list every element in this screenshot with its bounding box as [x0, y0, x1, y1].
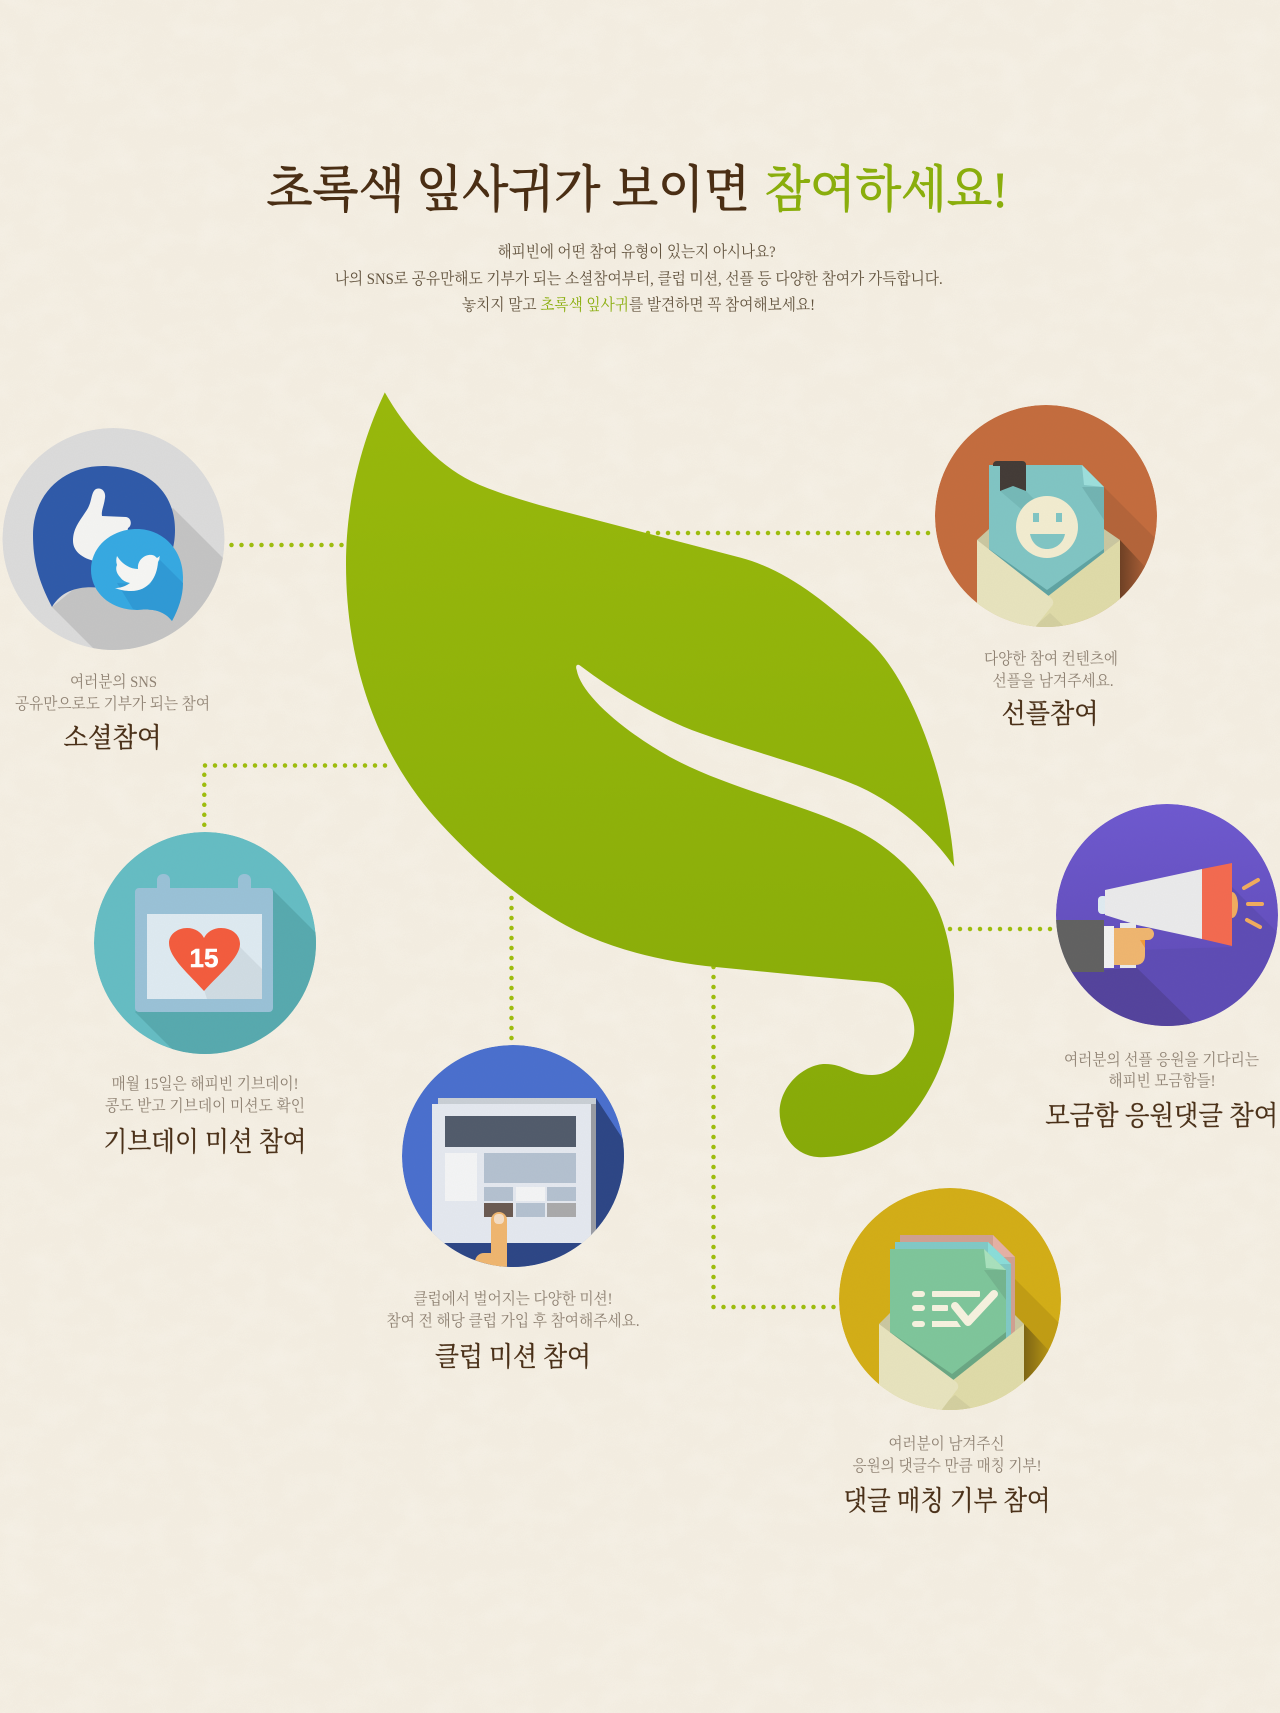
- connector: sunple: [648, 531, 929, 535]
- panel: donation box comments: [1045, 804, 1280, 1131]
- panel: comment matching donation: [839, 1188, 1070, 1516]
- connector: club mission: [509, 898, 514, 1039]
- icon: web page and finger: [402, 1045, 624, 1267]
- icon: envelope with checklist notes: [839, 1188, 1070, 1425]
- intro text: [335, 242, 943, 314]
- intro text: 해피빈에 어떤 참여 유형이 있는지 아시나요?: [498, 242, 776, 261]
- description line 2: 참여 전 해당 클럽 가입 후 참여해주세요.: [386, 1311, 640, 1330]
- description: 클럽에서 벌어지는 다양한 미션!: [414, 1289, 612, 1308]
- panel: social participation: [2, 428, 224, 750]
- description: 매월 15일은 해피빈 기브데이!: [112, 1074, 298, 1093]
- label: 소셜참여: [64, 723, 162, 753]
- label: 클럽 미션 참여: [435, 1342, 591, 1372]
- icon: calendar with heart: 15: [190, 943, 218, 973]
- intro text: 나의 SNS로 공유만해도 기부가 되는 소셜참여부터, 클럽 미션, 선플 등 다양한 참여가 가득합니다.: [335, 269, 943, 288]
- panel: sunple participation: [935, 405, 1170, 729]
- description: 여러분의 선플 응원을 기다리는: [1064, 1050, 1259, 1069]
- icon: megaphone in hand: [1056, 804, 1280, 1040]
- description line 2: 콩도 받고 기브데이 미션도 확인: [105, 1096, 305, 1115]
- icon: envelope with smiley note: [935, 405, 1157, 627]
- panel: club mission: [386, 1045, 660, 1372]
- description line 2: 응원의 댓글수 만큼 매칭 기부!: [852, 1456, 1042, 1475]
- connector: donation box: [950, 927, 1051, 931]
- connector: birthday mission: [204, 766, 385, 826]
- panel: birthday mission: [94, 832, 316, 1154]
- central leaf: [346, 392, 954, 1157]
- connector: social: [232, 543, 342, 547]
- label: 댓글 매칭 기부 참여: [844, 1486, 1050, 1516]
- heading: [266, 162, 1008, 218]
- connector: comment matching: [714, 967, 834, 1307]
- description line 2: 공유만으로도 기부가 되는 참여: [15, 694, 210, 713]
- label: 선플참여: [1002, 699, 1098, 729]
- label: 기브데이 미션 참여: [104, 1127, 306, 1157]
- infographic canvas: [2, 163, 1278, 1514]
- intro text: 놓치지 말고 초록색 잎사귀를 발견하면 꼭 참여해보세요!: [462, 295, 815, 314]
- icon: thumbs up and twitter bubbles: [2, 428, 224, 650]
- icon: calendar with heart: [94, 832, 316, 1054]
- description line 2: 해피빈 모금함들!: [1108, 1071, 1216, 1090]
- description: 여러분이 남겨주신: [888, 1434, 1004, 1453]
- description line 2: 선플을 남겨주세요.: [992, 671, 1114, 690]
- heading: 초록색 잎사귀가 보이면: [266, 162, 750, 218]
- heading: 참여하세요!: [764, 162, 1008, 218]
- description: 다양한 참여 컨텐츠에: [984, 649, 1118, 668]
- description: 여러분의 SNS: [70, 672, 157, 691]
